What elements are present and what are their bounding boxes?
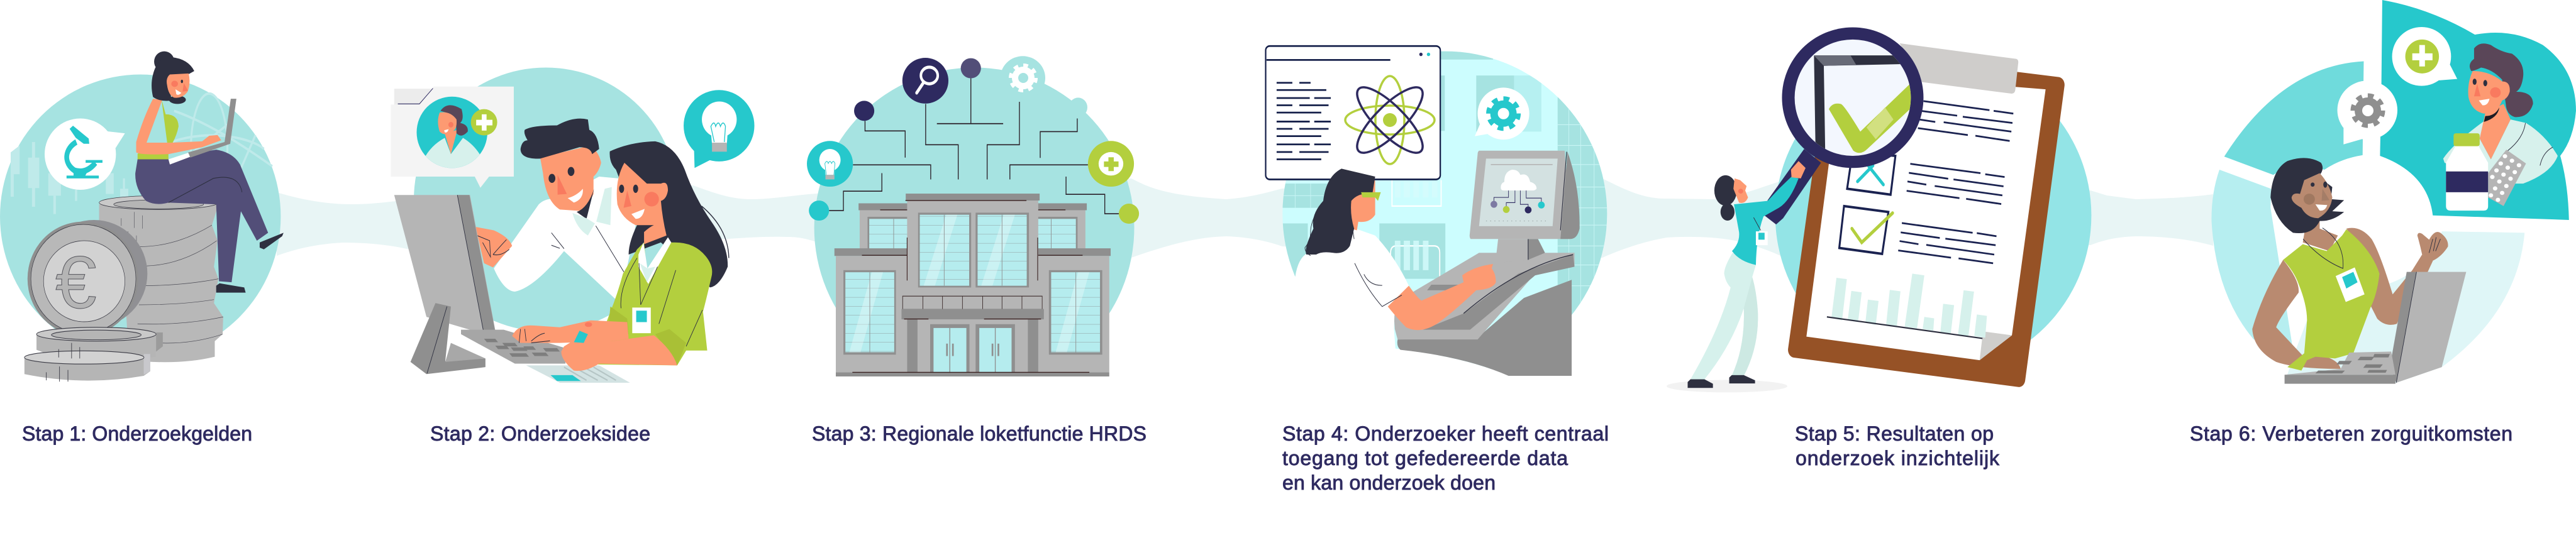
laptop	[2285, 272, 2466, 384]
node: magnifier	[902, 58, 948, 104]
speech bubble: microscope	[45, 118, 125, 190]
gear icon	[2353, 96, 2383, 126]
step 6 illustration	[2211, 0, 2576, 384]
node: gear backdrop	[1001, 56, 1045, 100]
medicine bottle	[2446, 133, 2488, 211]
woman at console	[1280, 168, 1496, 378]
label: step 5: Stap 5: Resultaten op	[1795, 422, 1994, 445]
atom icon	[1345, 76, 1435, 164]
woman with laptop	[135, 52, 284, 293]
background circle	[1775, 57, 2091, 373]
step 4 illustration	[1265, 46, 1611, 385]
mask below console	[1280, 348, 1611, 385]
lab background circle	[1280, 48, 1611, 381]
man pointing	[475, 119, 636, 300]
magnifying glass	[1763, 28, 1923, 224]
result text lines	[1898, 101, 2013, 263]
label: step 5: onderzoek inzichtelijk	[1796, 447, 2000, 469]
sector: top right	[2380, 0, 2576, 220]
checkbox with cross	[1847, 152, 1896, 195]
checkbox with check	[1840, 206, 1892, 254]
node: plus	[1088, 141, 1134, 187]
bar chart	[1827, 273, 1987, 338]
gear icon	[1011, 65, 1036, 90]
speech bubble: plus	[2392, 27, 2457, 86]
candlestick pattern	[11, 142, 128, 214]
label: step 6: Stap 6: Verbeteren zorguitkomsten	[2190, 422, 2512, 445]
node: light bulb	[807, 141, 853, 187]
label: step 2: Stap 2: Onderzoeksidee	[430, 422, 650, 445]
sector: bottom left	[2211, 170, 2293, 350]
clipboard	[1794, 43, 2058, 379]
step 3 illustration	[807, 56, 1140, 394]
faint atom pattern	[171, 94, 272, 204]
background circle	[0, 74, 280, 358]
building	[835, 194, 1111, 376]
sector: top left	[2224, 62, 2363, 175]
floor shadow	[1667, 380, 1787, 392]
step 1 illustration	[0, 52, 284, 381]
woman with laptop	[2252, 158, 2448, 371]
screen panel	[1265, 46, 1440, 179]
label: step 5	[1795, 422, 2000, 469]
woman at keyboard	[512, 141, 729, 371]
background circle	[814, 67, 1135, 388]
connecting ribbon	[277, 178, 2213, 258]
label: step 1: Stap 1: Onderzoekgelden	[22, 422, 252, 445]
video call panel	[391, 87, 514, 188]
small nodes	[809, 58, 1139, 224]
connector lines	[829, 79, 1119, 214]
coin stack	[99, 195, 223, 362]
keyboard	[461, 330, 630, 383]
step 2 illustration	[391, 67, 755, 383]
gear icon	[1489, 99, 1519, 129]
speech bubble: gear	[2338, 80, 2397, 145]
doctor	[2443, 43, 2558, 184]
speech bubble: gear backdrop	[1475, 87, 1530, 140]
lower coins	[25, 327, 163, 381]
label: step 4: toegang tot gefedereerde data	[1282, 447, 1568, 469]
pill blister	[2488, 150, 2526, 206]
sector: bottom right	[2285, 231, 2524, 383]
large euro coin	[28, 220, 147, 336]
label: step 4: en kan onderzoek doen	[1282, 471, 1496, 494]
euro symbol: €	[55, 241, 97, 324]
monitor	[394, 195, 497, 374]
mask below the building	[811, 376, 1140, 394]
label: step 3: Stap 3: Regionale loketfunctie HRDS	[812, 422, 1146, 445]
speech bubble: light bulb	[684, 90, 755, 168]
label: step 4	[1282, 422, 1609, 494]
step 5 illustration	[1667, 28, 2091, 392]
lab console	[1394, 151, 1580, 376]
person holding magnifier	[1687, 161, 1806, 388]
label: step 4: Stap 4: Onderzoeker heeft centraal	[1282, 422, 1609, 445]
background circle	[414, 67, 678, 331]
